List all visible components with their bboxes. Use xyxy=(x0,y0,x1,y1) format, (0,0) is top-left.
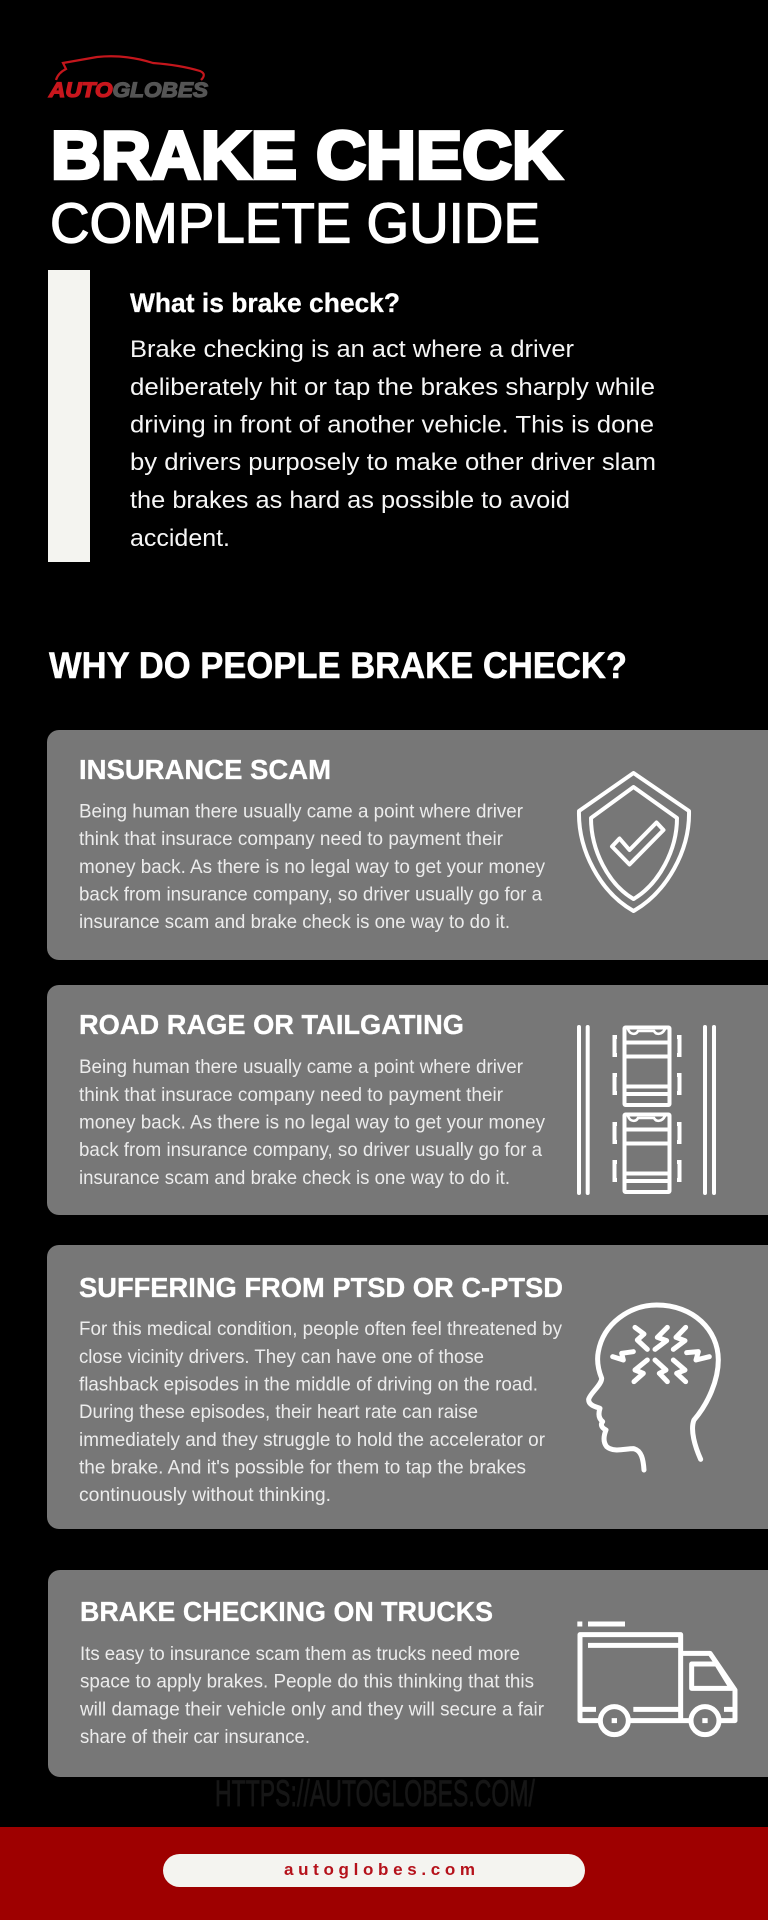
panel: insurance scam xyxy=(47,730,768,960)
intro body: the brakes as hard as possible to avoid xyxy=(130,487,570,514)
card heading: SUFFERING FROM PTSD OR C-PTSD xyxy=(79,1272,563,1303)
footer band xyxy=(0,1827,768,1920)
icon: delivery truck xyxy=(577,1624,735,1735)
subtitle: COMPLETE GUIDE xyxy=(50,192,540,256)
panel: brake checking on trucks xyxy=(48,1570,768,1777)
title: BRAKE CHECK xyxy=(51,118,562,194)
intro heading: What is brake check? xyxy=(130,288,400,318)
card body: immediately and they struggle to hold the accelerator or xyxy=(79,1429,545,1451)
card body: Being human there usually came a point where driver xyxy=(79,1056,523,1078)
card body: space to apply brakes. People do this thinking that this xyxy=(80,1670,534,1692)
card body: think that insurace company need to payment their xyxy=(79,828,503,850)
card background xyxy=(48,1570,768,1777)
card body xyxy=(79,1643,544,1748)
card body xyxy=(79,800,545,933)
card body: share of their car insurance. xyxy=(80,1726,310,1748)
intro body: accident. xyxy=(130,525,230,552)
card body xyxy=(79,1056,545,1189)
card body xyxy=(79,1318,562,1506)
footer url: autoglobes.com xyxy=(284,1860,475,1879)
intro text block xyxy=(130,288,656,552)
footer pill xyxy=(163,1854,585,1887)
panel: road rage or tailgating xyxy=(47,985,768,1215)
card background xyxy=(47,730,768,960)
intro body: deliberately hit or tap the brakes sharply while xyxy=(130,374,655,401)
card background xyxy=(47,1245,768,1529)
logo car line xyxy=(56,56,204,80)
watermark url: HTTPS://AUTOGLOBES.COM/ xyxy=(215,1772,535,1814)
logo word: AUTOGLOBES xyxy=(48,79,208,102)
card body: flashback episodes in the middle of driving on the road. xyxy=(79,1374,538,1396)
card body: the brake. And it's possible for them to tap the brakes xyxy=(79,1456,526,1478)
card body: back from insurance company, so driver usually go for a xyxy=(79,1139,542,1161)
card body: continuously without thinking. xyxy=(79,1484,331,1506)
section heading: WHY DO PEOPLE BRAKE CHECK? xyxy=(49,645,627,686)
red band xyxy=(0,1827,768,1920)
card body: think that insurace company need to payment their xyxy=(79,1084,503,1106)
icon: head with stress bolts xyxy=(589,1305,718,1470)
icon: shield with check xyxy=(579,773,689,911)
card heading: ROAD RAGE OR TAILGATING xyxy=(79,1009,464,1040)
card body: insurance scam and brake check is one way to do it. xyxy=(79,1167,510,1189)
card body: money back. As there is no legal way to get your money xyxy=(79,1112,545,1134)
card body: Its easy to insurance scam them as trucks need more xyxy=(80,1643,520,1665)
card body: back from insurance company, so driver usually go for a xyxy=(79,884,542,906)
card body: will damage their vehicle only and they will secure a fair xyxy=(79,1698,544,1720)
card body: Being human there usually came a point where driver xyxy=(79,800,523,822)
intro body: by drivers purposely to make other driver slam xyxy=(130,449,656,476)
card body: close vicinity drivers. They can have one of those xyxy=(79,1346,484,1368)
card heading: INSURANCE SCAM xyxy=(79,754,331,785)
card body: During these episodes, their heart rate can raise xyxy=(79,1401,478,1423)
card body: insurance scam and brake check is one way to do it. xyxy=(79,911,510,933)
card body: For this medical condition, people often feel threatened by xyxy=(79,1318,562,1340)
intro body: driving in front of another vehicle. This is done xyxy=(130,412,654,438)
card body: money back. As there is no legal way to get your money xyxy=(79,856,545,878)
logo xyxy=(48,56,208,102)
intro body xyxy=(130,336,656,552)
icon: cars on road xyxy=(579,1027,714,1193)
accent bar xyxy=(48,270,90,562)
intro body: Brake checking is an act where a driver xyxy=(130,336,574,363)
card heading: BRAKE CHECKING ON TRUCKS xyxy=(80,1596,493,1627)
panel: ptsd xyxy=(47,1245,768,1529)
card background xyxy=(47,985,768,1215)
